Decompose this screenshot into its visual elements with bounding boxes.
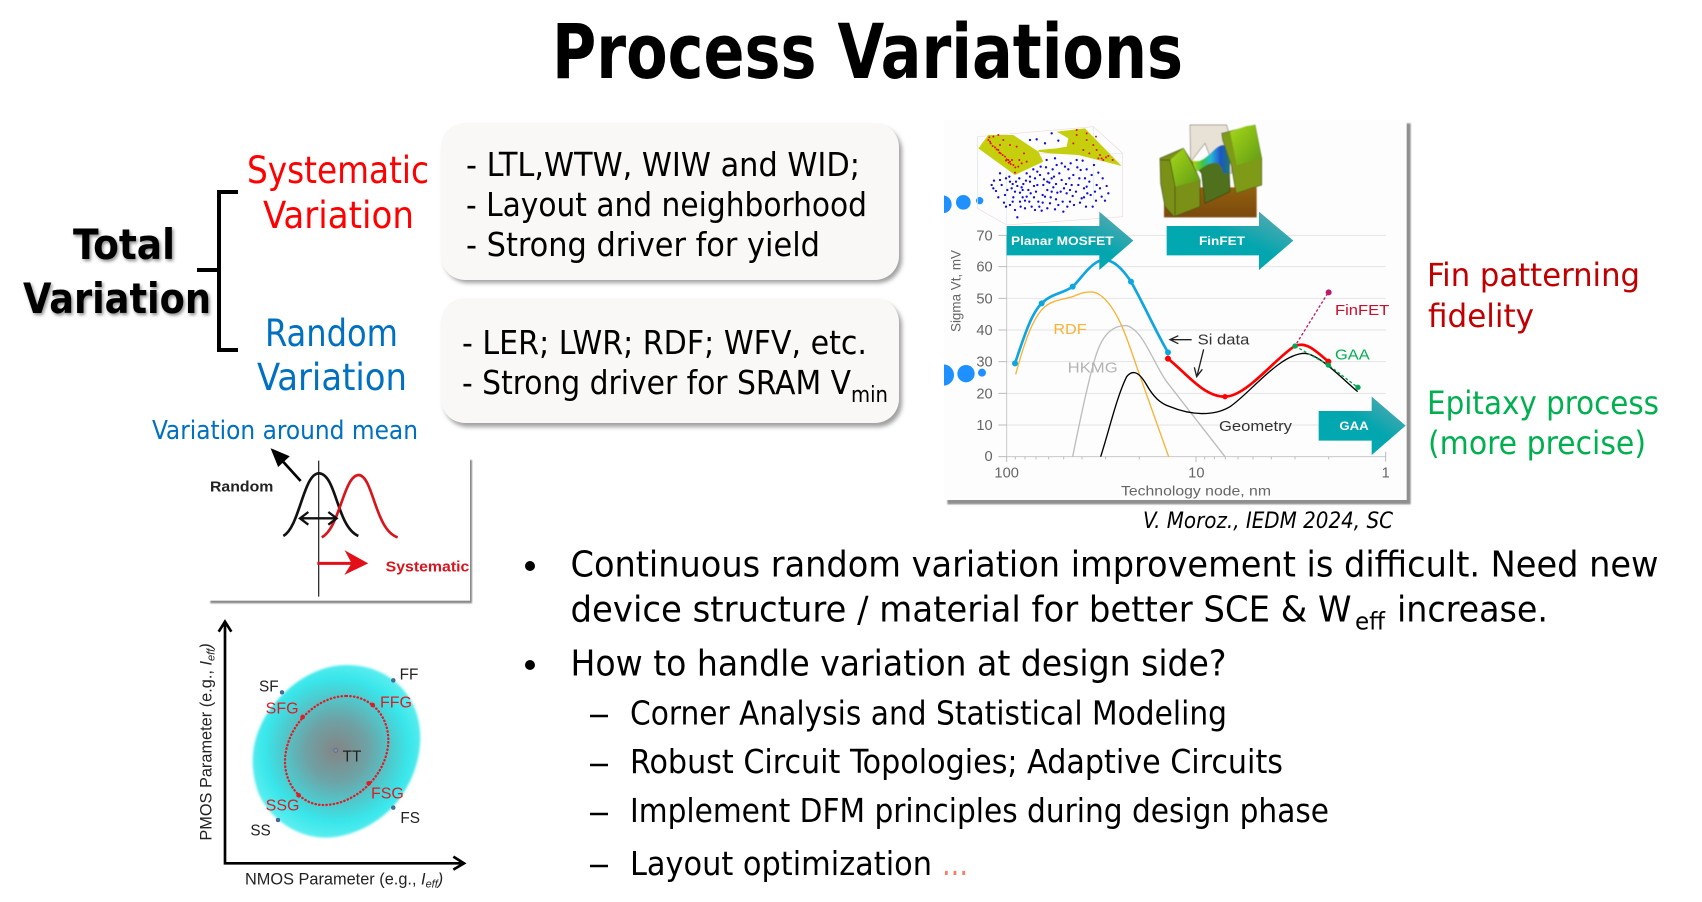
x axis labels: 100 <box>994 465 1019 481</box>
image: FinFET 3D structure <box>1160 125 1262 217</box>
y axis title: ) <box>198 643 216 651</box>
corner labels: FS <box>400 810 420 827</box>
total variation heading <box>23 220 211 323</box>
random variation label: Variation <box>257 356 407 399</box>
systematic variation label <box>247 149 429 237</box>
bracket connector <box>197 192 238 350</box>
curve: GAA dashed projection <box>1292 343 1361 390</box>
y axis labels: 0 <box>985 449 993 465</box>
y axis labels <box>976 228 993 465</box>
label: Random: Random <box>210 480 273 496</box>
x axis title: Technology node, nm <box>1121 483 1271 498</box>
curve: systematic distribution <box>322 475 398 537</box>
bullet list: design side methods: Robust Circuit Topologies; Adaptive Circuits <box>630 742 1283 781</box>
global corner loop <box>285 696 388 805</box>
random variation label <box>257 312 407 399</box>
curve labels: FinFET <box>1335 303 1389 319</box>
y axis labels: 40 <box>976 323 993 339</box>
panel: systematic details: - LTL,WTW, WIW and WID; <box>466 145 860 184</box>
annotation: fin patterning fidelity: Fin patterning <box>1427 256 1640 294</box>
bullet list: design side methods: Layout optimization <box>630 844 932 883</box>
blue bubbles <box>944 195 986 386</box>
arrow: GAA <box>1319 397 1406 455</box>
arrow: GAA: GAA <box>1339 420 1369 433</box>
curve labels: Si data <box>1198 332 1250 348</box>
bullet list: main points: device structure / material for better SCE & W <box>570 590 1352 630</box>
chart panel: sigma Vt vs technology node <box>933 120 1411 504</box>
curve labels: Geometry <box>1219 419 1293 435</box>
y axis title: eff <box>205 648 217 661</box>
systematic variation label: Variation <box>263 194 414 237</box>
corner labels <box>250 666 420 839</box>
panel: random details: min <box>851 383 888 408</box>
curve: Geometry <box>1101 353 1358 457</box>
y axis title: PMOS Parameter (e.g., I <box>198 661 216 841</box>
y axis labels: 20 <box>976 386 993 402</box>
bullet list: design side methods: ... <box>942 844 968 883</box>
curve labels: HKMG <box>1068 361 1118 377</box>
arrows: Si data pointers <box>1170 336 1204 377</box>
panel: random vs systematic distributions <box>208 451 472 603</box>
global corner labels: FSG <box>371 785 404 802</box>
annotation: epitaxy process <box>1427 384 1659 462</box>
title: Process Variations <box>552 7 1183 96</box>
systematic variation label: Systematic <box>247 149 429 192</box>
annotation: epitaxy process: (more precise) <box>1428 424 1646 462</box>
curve: random distribution <box>283 473 358 536</box>
bullet list: main points: increase. <box>1397 590 1548 630</box>
corner markers <box>276 678 395 822</box>
total variation heading: Total <box>73 220 175 269</box>
bullet list: main points: eff <box>1355 608 1386 636</box>
chart: process corners <box>198 622 464 890</box>
y axis labels: 30 <box>976 355 993 371</box>
panel: systematic details: - Strong driver for yield <box>466 225 820 264</box>
label: Systematic: Systematic <box>386 560 469 576</box>
global corner labels: SSG <box>266 798 299 815</box>
x axis labels: 1 <box>1382 465 1390 481</box>
variation around mean label: Variation around mean <box>152 416 418 446</box>
y axis labels: 70 <box>976 228 993 244</box>
panel: random details: - LER; LWR; RDF; WFV, etc. <box>462 323 867 362</box>
bullet list: design side methods: Corner Analysis and Statistical Modeling <box>630 694 1227 732</box>
arrow: Planar MOSFET: Planar MOSFET <box>1011 235 1114 248</box>
curve labels: GAA <box>1335 347 1370 363</box>
annotation: fin patterning fidelity: fidelity <box>1428 297 1534 335</box>
annotation: fin patterning fidelity <box>1427 256 1640 335</box>
curve: Si data blue <box>1012 260 1171 366</box>
x axis title: eff <box>426 878 439 890</box>
annotation: epitaxy process: Epitaxy process <box>1427 384 1659 422</box>
panel: systematic details <box>441 123 902 283</box>
curve labels <box>1053 303 1389 435</box>
curve labels: RDF <box>1053 322 1087 338</box>
bullet list: main points: Continuous random variation improvement is difficult. Need new <box>570 544 1658 586</box>
x axis labels: 10 <box>1188 465 1204 481</box>
arrow: Planar MOSFET <box>1007 212 1133 270</box>
panel: random details <box>441 298 902 427</box>
citation: V. Moroz., IEDM 2024, SC <box>1143 509 1393 534</box>
bullet list: main points <box>525 544 1658 684</box>
global corner labels <box>266 695 412 815</box>
x axis labels <box>994 465 1390 481</box>
curve: Si data red <box>1165 345 1331 399</box>
curve: RDF <box>1016 292 1169 457</box>
y axis labels: 50 <box>976 291 993 307</box>
total variation heading: Variation <box>23 274 211 323</box>
corner labels: SS <box>250 822 271 839</box>
panel: random details: - Strong driver for SRAM V <box>462 363 852 402</box>
random variation label: Random <box>265 312 398 355</box>
arrow: random pointer <box>273 451 301 481</box>
bullet list: design side methods <box>590 694 1329 883</box>
arrow: FinFET <box>1167 212 1293 270</box>
x axis title: ) <box>436 871 443 889</box>
global corner labels: FFG <box>380 695 412 712</box>
curve: HKMG <box>1073 326 1225 457</box>
axes <box>219 622 464 870</box>
x axis title: NMOS Parameter (e.g., I <box>245 871 426 889</box>
curve: FinFET dashed projection <box>1297 289 1332 343</box>
arrow: spread <box>300 512 337 525</box>
bullet list: design side methods: Implement DFM principles during design phase <box>630 791 1329 830</box>
corner labels: SF <box>259 678 279 695</box>
global corner labels: SFG <box>266 700 299 717</box>
corner labels: FF <box>400 666 418 683</box>
bullet list: main points: How to handle variation at design side? <box>570 644 1226 684</box>
arrow: systematic shift <box>317 554 365 571</box>
corner distribution blob <box>253 665 420 838</box>
y axis title: Sigma Vt, mV <box>948 249 964 332</box>
panel: systematic details: - Layout and neighborhood <box>466 185 867 224</box>
y axis labels: 60 <box>976 260 993 276</box>
arrow: FinFET: FinFET <box>1199 235 1245 248</box>
image: planar MOSFET dopant cube <box>977 127 1123 225</box>
y axis labels: 10 <box>976 418 993 434</box>
corner labels: TT <box>343 749 362 766</box>
